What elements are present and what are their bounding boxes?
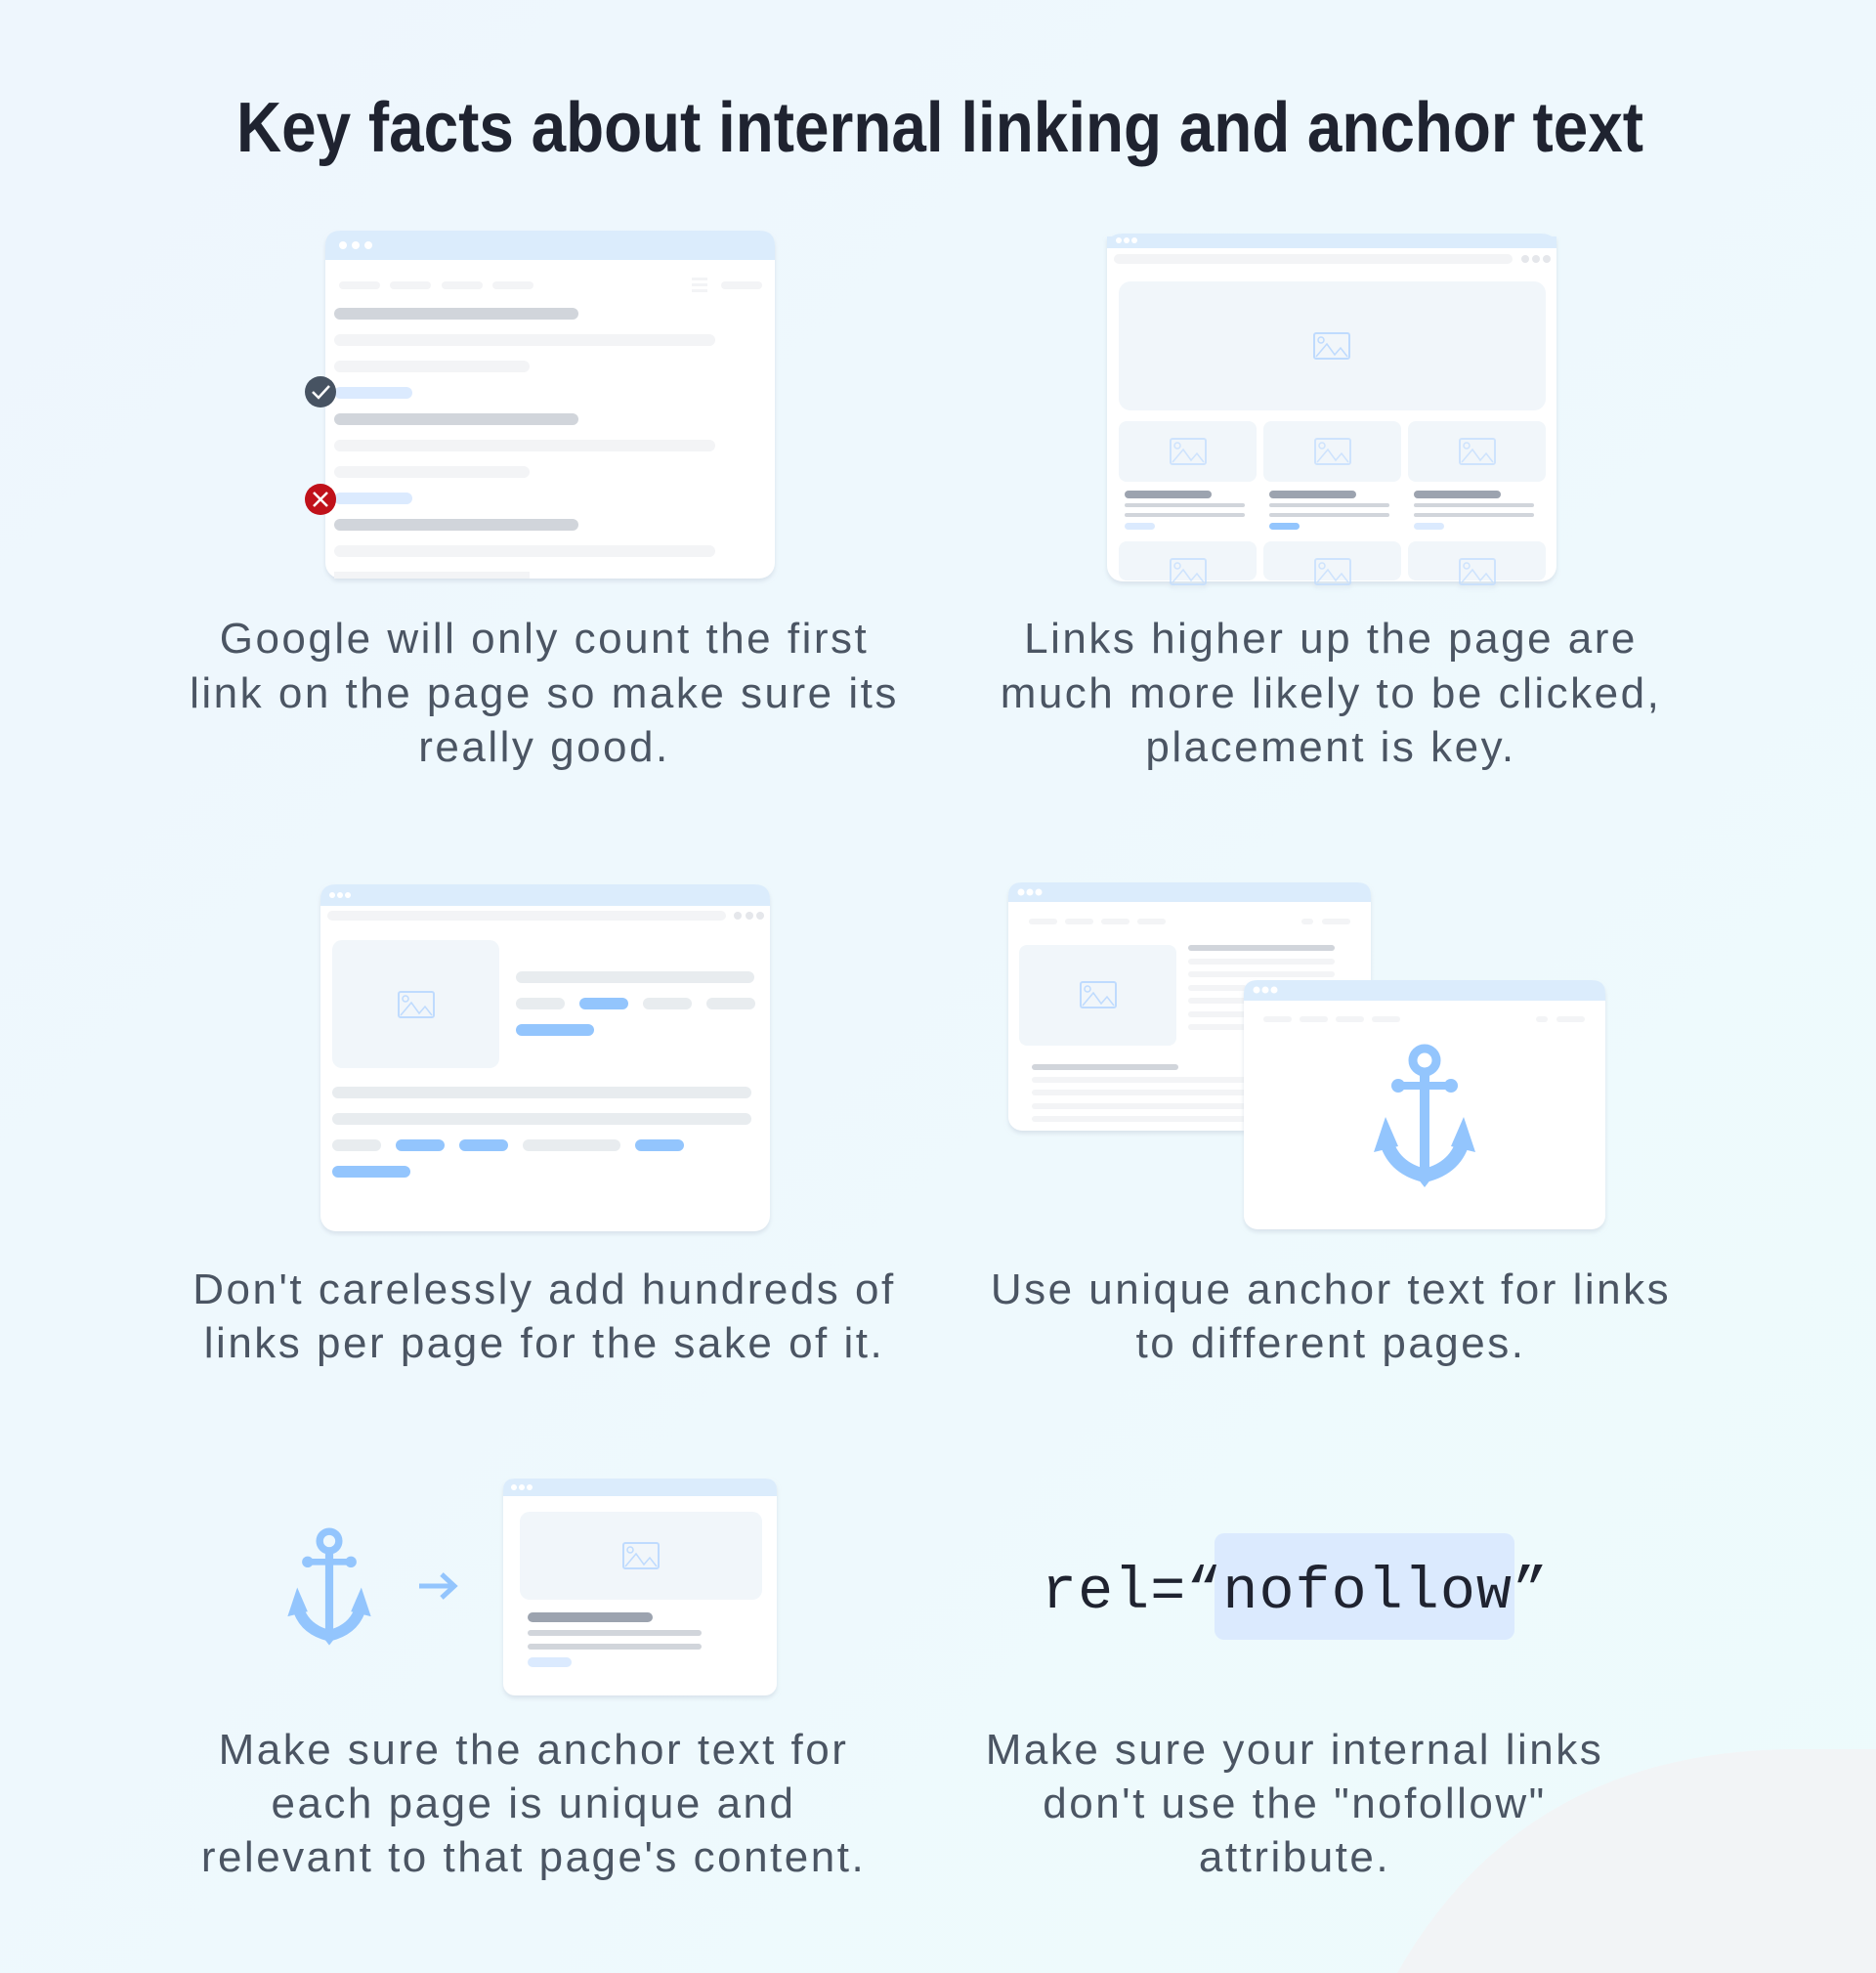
text: placement: Links higher up the page are	[1024, 615, 1638, 663]
text: many links: Don't carelessly add hundreds of	[192, 1265, 896, 1313]
icon: anchor	[1374, 1049, 1475, 1187]
text: unique anchor: Use unique anchor text for links	[991, 1265, 1671, 1313]
panel: too many links	[192, 884, 896, 1367]
decorative corner blob	[1397, 1749, 1876, 1973]
panel: nofollow	[986, 1533, 1603, 1881]
text: first link: link on the page so make sure its	[190, 669, 899, 717]
browser: many links	[320, 884, 770, 1231]
icon: anchor small	[287, 1531, 371, 1646]
browser: target page	[503, 1479, 777, 1695]
icon: check	[305, 376, 336, 407]
browser: placement	[1107, 234, 1556, 584]
code highlight box	[1215, 1533, 1514, 1640]
text: many links: links per page for the sake of it.	[204, 1319, 884, 1367]
text: placement: much more likely to be clicked,	[1001, 669, 1661, 717]
text: relevant anchor: each page is unique and	[271, 1780, 796, 1827]
text: first link: really good.	[418, 723, 670, 771]
panel: first link counts	[190, 231, 899, 771]
icon: cross	[305, 484, 336, 515]
text: relevant anchor: Make sure the anchor text for	[219, 1726, 848, 1774]
browser: back page	[1008, 882, 1371, 1131]
browser: first link	[325, 231, 775, 579]
text: nofollow: don't use the "nofollow"	[1043, 1780, 1547, 1827]
panel: placement	[1001, 234, 1661, 771]
text: relevant anchor: relevant to that page's content.	[201, 1833, 866, 1881]
text: first link: Google will only count the first	[220, 615, 869, 663]
text: placement: placement is key.	[1145, 723, 1516, 771]
panel: relevant anchor text	[201, 1479, 866, 1881]
title: Key facts about internal linking and anchor text	[236, 89, 1643, 167]
code: rel nofollow: rel=“nofollow”	[1042, 1560, 1548, 1626]
text: unique anchor: to different pages.	[1136, 1319, 1525, 1367]
text: nofollow: attribute.	[1199, 1833, 1390, 1881]
browser: front page with anchor	[1244, 980, 1605, 1229]
arrow	[419, 1574, 454, 1598]
panel: unique anchor text	[991, 882, 1671, 1367]
text: nofollow: Make sure your internal links	[986, 1726, 1603, 1774]
